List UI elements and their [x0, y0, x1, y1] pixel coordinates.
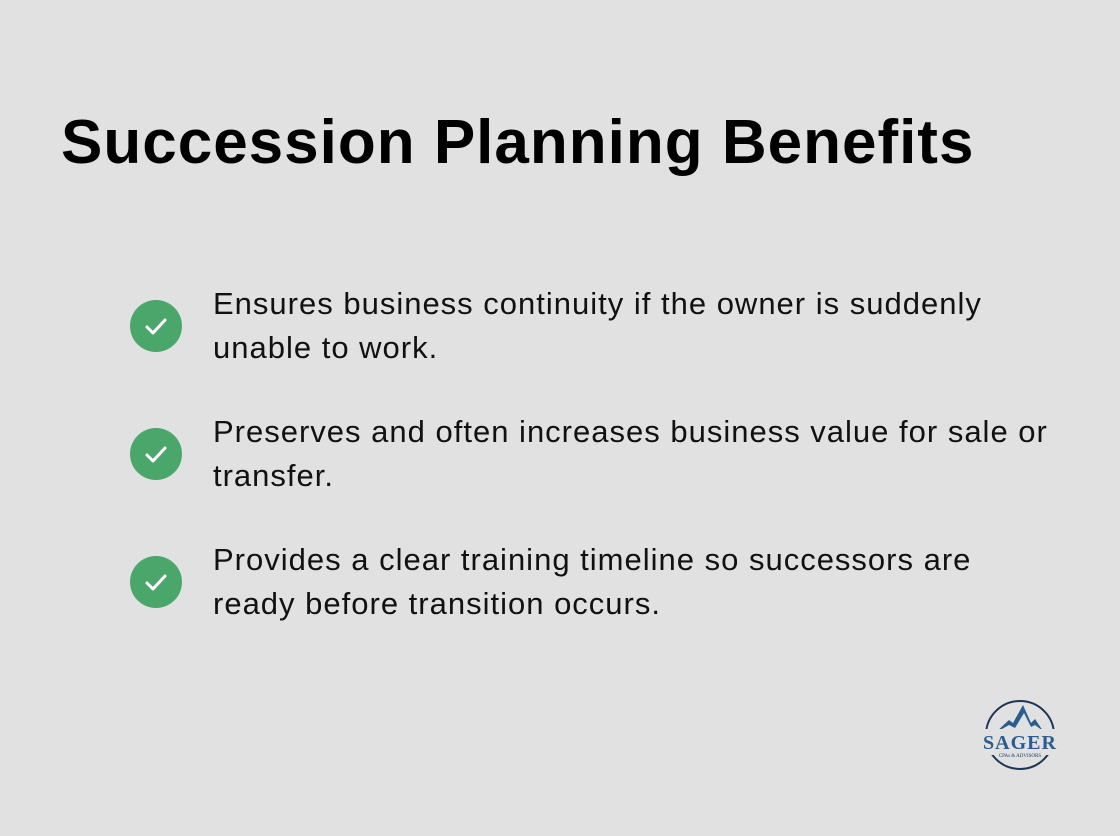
- text 1: [213, 286, 982, 365]
- text 2: transfer.: [213, 458, 334, 493]
- benefit item 3: [130, 542, 971, 621]
- logo: Sager: SAGER: [983, 732, 1057, 754]
- text 3: Provides a clear training timeline so successors are: [213, 542, 971, 577]
- text 3: ready before transition occurs.: [213, 586, 661, 621]
- logo: Sager: CPAs & ADVISORS: [999, 754, 1041, 759]
- icon: check: [130, 300, 182, 352]
- text 2: Preserves and often increases business value for sale or: [213, 414, 1048, 449]
- text 1: unable to work.: [213, 330, 438, 365]
- text 2: [213, 414, 1048, 493]
- text 1: Ensures business continuity if the owner is suddenly: [213, 286, 982, 321]
- icon: check: [130, 556, 182, 608]
- benefit item 2: [130, 414, 1048, 493]
- text 3: [213, 542, 971, 621]
- title: Succession Planning Benefits: [61, 108, 974, 177]
- benefit item 1: [130, 286, 982, 365]
- icon: check: [130, 428, 182, 480]
- logo: Sager: [983, 700, 1057, 770]
